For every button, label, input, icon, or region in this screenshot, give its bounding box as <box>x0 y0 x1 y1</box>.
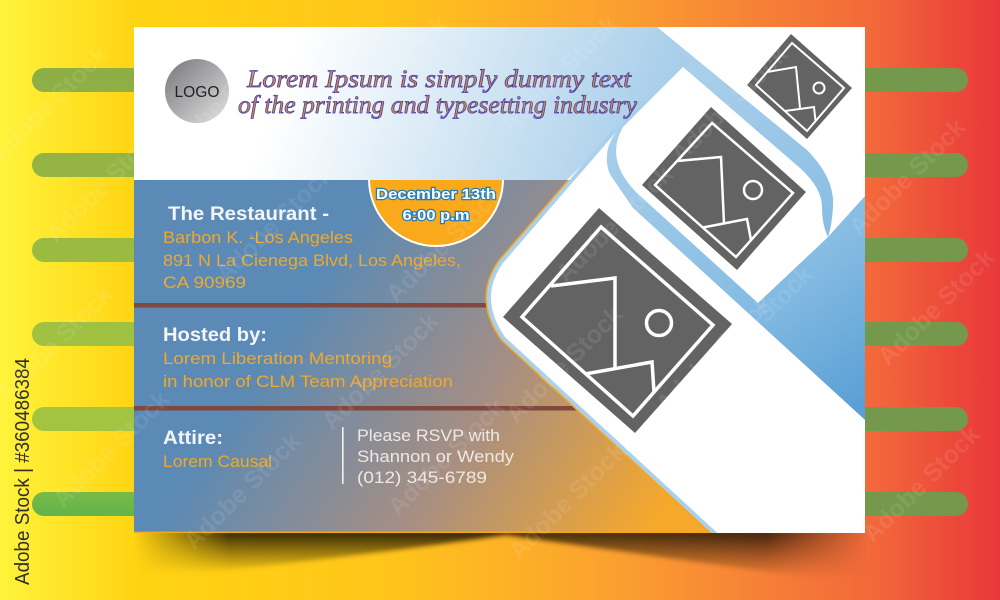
stock watermarks: Adobe Stock <box>47 385 175 513</box>
text block: restaurant: The Restaurant - <box>168 204 329 225</box>
right green stripes <box>840 68 968 516</box>
panel: event details gradient <box>134 180 730 533</box>
title: of the printing and typesetting industry <box>238 92 638 119</box>
light blue edge of white band <box>491 131 725 540</box>
divider line upper <box>134 303 486 308</box>
stock watermarks: Adobe Stock <box>178 427 306 555</box>
card drop shadow <box>138 533 863 575</box>
text block: attire: Lorem Causal <box>163 452 272 471</box>
text block: restaurant: CA 90969 <box>163 273 246 292</box>
stock watermarks: Adobe Stock <box>495 10 623 138</box>
stock watermarks: Adobe Stock <box>665 40 793 168</box>
stock watermarks: Adobe Stock <box>210 160 338 288</box>
logo circle: LOGO <box>174 84 220 101</box>
text block: rsvp <box>357 426 515 487</box>
text block: hosted by: in honor of CLM Team Appreciation <box>163 372 453 391</box>
divider line lower <box>134 406 584 410</box>
stock watermarks: Adobe Stock <box>550 160 678 288</box>
panel: header gradient <box>282 27 690 180</box>
text block: hosted by: Lorem Liberation Mentoring <box>163 349 392 368</box>
gold edge of white band <box>485 180 707 530</box>
stock watermarks: Adobe Stock <box>500 300 628 428</box>
stock watermarks: Adobe Stock <box>382 393 510 521</box>
text block: hosted by: Hosted by: <box>163 325 267 346</box>
text block: restaurant: 891 N La Cienega Blvd, Los Angeles, <box>163 251 461 270</box>
badge: date and time <box>368 180 504 247</box>
left green stripes <box>32 68 162 516</box>
text block: restaurant: Barbon K. -Los Angeles <box>163 228 353 247</box>
icon: medium image placeholder <box>642 107 806 270</box>
stock watermarks: Adobe Stock <box>325 10 453 138</box>
stock watermarks: Adobe Stock <box>155 40 283 168</box>
stock watermarks: Adobe Stock <box>872 243 1000 371</box>
card <box>134 27 865 540</box>
logo circle <box>165 59 229 123</box>
badge: date and time: December 13th <box>376 186 496 203</box>
stock watermarks: Adobe Stock <box>713 402 841 530</box>
stock watermarks: Adobe Stock <box>690 260 818 388</box>
stock watermarks: Adobe Stock <box>857 420 985 548</box>
white diagonal band <box>491 131 865 540</box>
text block: rsvp: (012) 345-6789 <box>357 468 487 487</box>
icon: large image placeholder <box>503 208 732 433</box>
stock watermarks: Adobe Stock <box>503 437 631 565</box>
text block: rsvp: Shannon or Wendy <box>357 447 515 466</box>
white inner pill <box>616 67 828 303</box>
text block: restaurant <box>163 204 461 292</box>
badge: date and time: 6:00 p.m <box>402 207 470 224</box>
title <box>238 66 638 119</box>
stock watermarks: Adobe Stock <box>380 180 508 308</box>
stock watermarks: Adobe Stock <box>650 290 778 418</box>
icon: small image placeholder <box>747 34 852 139</box>
panel bottom edge <box>134 532 724 533</box>
text block: attire <box>164 430 271 467</box>
text block: attire: Attire: <box>163 428 223 449</box>
text block: rsvp: Please RSVP with <box>357 426 500 445</box>
vertical credit text: Adobe Stock | #360486384 <box>11 358 34 585</box>
title: Lorem Ipsum is simply dummy text <box>246 66 632 93</box>
text block: hosted by <box>163 325 453 391</box>
stock watermarks: Adobe Stock <box>40 120 168 248</box>
vertical divider <box>342 427 344 484</box>
stock watermarks: Adobe Stock <box>843 113 971 241</box>
stock watermarks: Adobe Stock <box>316 307 444 435</box>
blue swoosh band <box>600 27 865 420</box>
